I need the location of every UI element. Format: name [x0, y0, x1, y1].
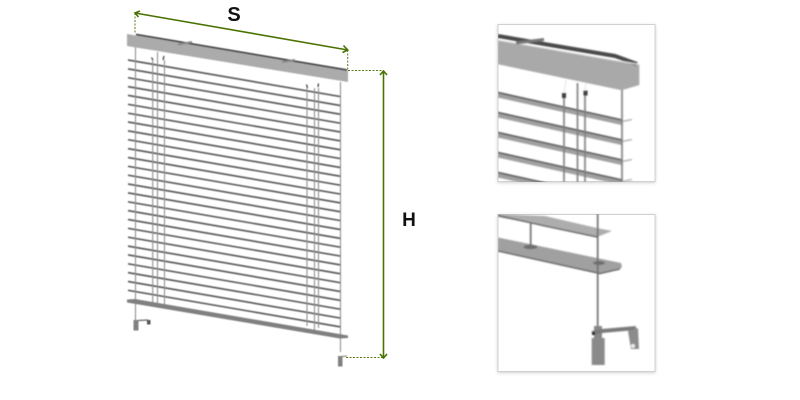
- detail bottom rail: [498, 238, 622, 274]
- detail headrail: [498, 40, 639, 90]
- detail slats: [498, 91, 632, 182]
- detail cords: [531, 214, 598, 326]
- left weight: [134, 320, 150, 330]
- cord hooks: [152, 56, 318, 88]
- panel: top detail: [498, 24, 655, 202]
- detail hooks: [562, 91, 587, 98]
- detail bracket and weight: [592, 338, 605, 365]
- headrail: [127, 34, 348, 82]
- blind illustration: [127, 34, 348, 366]
- dimension H: [346, 70, 416, 358]
- label S: S: [227, 4, 241, 26]
- label H: H: [402, 210, 416, 231]
- detail cords: [564, 83, 622, 182]
- right weight: [338, 356, 347, 366]
- detail slat: [498, 214, 612, 237]
- dimension S: [135, 4, 348, 70]
- slats: [128, 60, 341, 327]
- ladder cords: [136, 46, 340, 352]
- panel: bottom detail: [498, 214, 655, 372]
- bottom rail: [127, 299, 348, 338]
